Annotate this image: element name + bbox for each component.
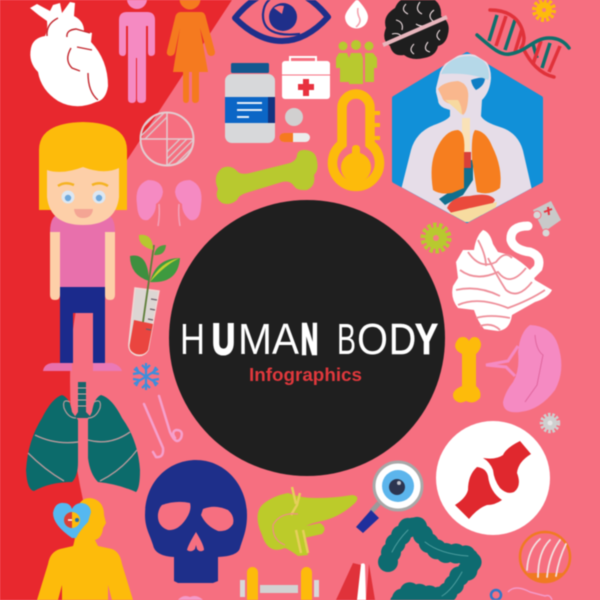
heading: HUMAN BODY: O <box>357 315 388 364</box>
icon: small intestine <box>452 226 552 331</box>
icon: pill bottle <box>225 63 275 143</box>
icon: hair follicle circle <box>520 532 570 582</box>
icon: man figure <box>119 0 155 103</box>
icon: dumbbell <box>240 567 319 600</box>
icon: snowflake <box>133 363 159 390</box>
heading: HUMAN BODY: A <box>272 315 300 364</box>
icon: gear yellow <box>534 0 554 20</box>
heading: HUMAN BODY: U <box>212 315 235 364</box>
icon: pink spleen <box>486 325 561 412</box>
figure: yellow body with heart <box>37 498 133 600</box>
icon: eye <box>235 0 328 41</box>
icon: anatomical heart <box>30 2 108 106</box>
subtitle: Infographics: Infographics <box>249 365 362 385</box>
heading: HUMAN BODY <box>180 315 438 364</box>
background: red diagonal band <box>0 0 232 600</box>
heading: HUMAN BODY: H <box>180 315 205 364</box>
heading: HUMAN BODY: Y <box>415 315 438 364</box>
heading: HUMAN BODY: D <box>389 315 416 364</box>
icon: magnifying glass with eye <box>356 462 422 533</box>
icon: kidneys <box>136 180 202 226</box>
chart: hatched pie <box>138 111 195 167</box>
trousers <box>60 287 105 363</box>
torso and head <box>401 54 532 215</box>
icon: green bone <box>216 150 318 204</box>
icon: grey gear <box>542 414 558 432</box>
icon: pancreas <box>258 487 357 556</box>
icon: pink wind lines <box>144 396 182 457</box>
icon: pills <box>280 108 310 142</box>
vessels and stomach <box>439 160 473 205</box>
eyes <box>62 190 74 204</box>
central black circle <box>169 200 445 476</box>
icon: thermometer <box>332 94 380 186</box>
lungs <box>432 130 464 194</box>
icon: pink shape under skull <box>178 596 203 600</box>
heading: HUMAN BODY: M <box>238 315 272 364</box>
shirt <box>50 214 115 287</box>
icon: colon <box>388 526 472 600</box>
arms <box>50 232 115 300</box>
icon: first aid kit <box>282 57 330 99</box>
icon: DNA helix <box>477 10 569 77</box>
icon: water drop <box>345 0 368 29</box>
icon: plant in test tube <box>129 235 180 355</box>
hair <box>39 122 127 210</box>
shoes <box>43 363 72 371</box>
icon: group of people <box>336 40 377 84</box>
eyebrows <box>58 183 108 186</box>
icon: joint in white circle <box>436 421 550 535</box>
icon: grey ambulance <box>533 201 561 237</box>
face <box>47 167 119 225</box>
heading: HUMAN BODY: N <box>301 315 318 364</box>
figure: blonde girl <box>39 122 127 371</box>
icon: red muscle <box>336 563 375 600</box>
hexagon: respiratory system <box>394 54 541 222</box>
heading: HUMAN BODY: B <box>337 315 356 364</box>
icon: yellow bone <box>453 337 481 403</box>
icon: brain with stick <box>383 0 449 59</box>
icon: navy skull <box>145 460 247 583</box>
mouth <box>74 209 93 218</box>
icon: woman figure <box>167 0 215 103</box>
icon: blue ring and pink outline <box>491 588 552 600</box>
icon: green gear <box>423 225 449 251</box>
icon: teal lungs <box>26 382 140 492</box>
